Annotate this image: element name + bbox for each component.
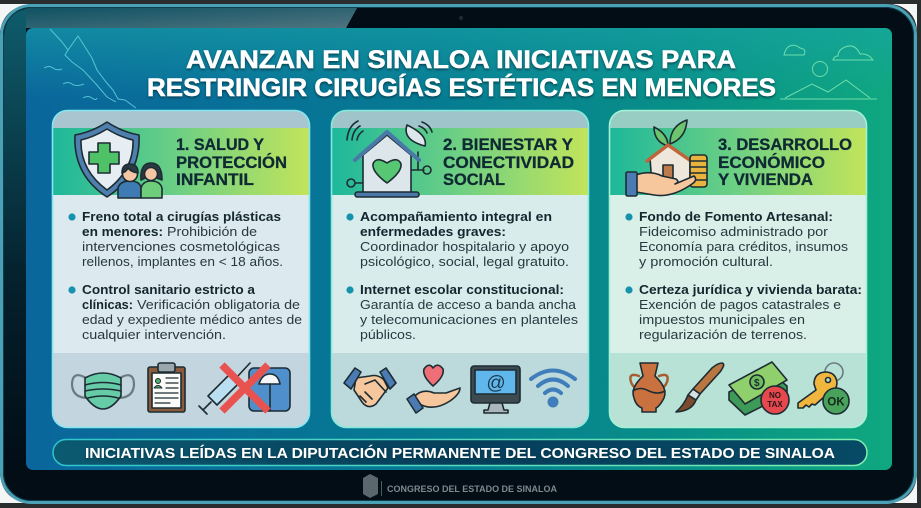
decoration: Sinaloa map outline xyxy=(44,29,136,108)
icon: stack of money with no tax badge: $ xyxy=(754,378,760,389)
text block: card 2 bullet 1: Coordinador hospitalario y apoyo xyxy=(360,239,569,254)
text block: card 1 bullet 2: clínicas: xyxy=(82,297,133,312)
heading: card 2 xyxy=(443,136,574,189)
icon: paintbrush xyxy=(676,363,724,412)
text block: card 2 bullet 1: Acompañamiento integral en xyxy=(360,209,552,224)
heading: card 1: 1. SALUD Y xyxy=(176,136,264,154)
heading: card 1 xyxy=(176,136,287,189)
text block: card 2 bullet 2: públicos. xyxy=(360,327,416,342)
icon: hand holding heart xyxy=(407,365,460,413)
panel: 1 salud y proteccion infantil xyxy=(52,110,310,428)
text block: card 3 bullet 1: Economía para créditos, insumos xyxy=(639,239,848,254)
icon: shield with cross and children xyxy=(75,122,162,198)
text block: card 3 bullet 1 xyxy=(625,209,848,269)
icon: computer monitor xyxy=(471,366,520,413)
text block: card 3 bullet 2 xyxy=(625,282,862,342)
title xyxy=(147,46,776,102)
icon: syringe and scale crossed out xyxy=(199,363,290,414)
text block: card 2 bullet 2: Internet escolar constitucional: xyxy=(360,282,564,297)
title: AVANZAN EN SINALOA INICIATIVAS PARA xyxy=(186,46,736,74)
text block: card 1 bullet 1: Prohibición de xyxy=(167,224,257,239)
decoration: clouds, sun and hills xyxy=(780,45,877,99)
text block: card 1 bullet 1: rellenos, implantes en < 18 años. xyxy=(82,254,283,269)
text block: card 3 bullet 2: Exención de pagos catastrales e xyxy=(639,297,841,312)
text block: card 1 bullet 2: edad y expediente médico antes de xyxy=(82,312,302,327)
heading: card 3: 3. DESARROLLO xyxy=(718,136,852,154)
icon: clipboard xyxy=(148,363,185,412)
icon: hand holding house, coins and sprout xyxy=(626,120,707,196)
text block: card 3 bullet 1: Fideicomiso administrado por xyxy=(639,224,829,239)
text block: card 2 bullet 2: y telecomunicaciones en planteles xyxy=(360,312,578,327)
icon: stack of money with no tax badge xyxy=(729,362,789,415)
text block: card 1 bullet 1: intervenciones cosmetológicas xyxy=(82,239,280,254)
text block: card 1 bullet 2: cualquier intervención. xyxy=(82,327,226,342)
icon: stack of money with no tax badge: TAX xyxy=(767,400,783,409)
panel: 3 desarrollo economico y vivienda xyxy=(609,110,867,428)
text block: card 2 bullet 1: enfermedades graves: xyxy=(360,224,506,239)
text block: card 1 bullet 1: Freno total a cirugías plásticas xyxy=(82,209,281,224)
icon: key with ok seal: OK xyxy=(827,396,845,408)
text block: card 3 bullet 2: regularización de terrenos. xyxy=(639,327,807,342)
text block: card 3 bullet 2: impuestos municipales en xyxy=(639,312,805,327)
text block: card 2 bullet 1: psicológico, social, legal gratuito. xyxy=(360,254,569,269)
emblem and institution name: CONGRESO DEL ESTADO DE SINALOA xyxy=(387,484,558,494)
heading: card 1: INFANTIL xyxy=(176,171,254,189)
title: RESTRINGIR CIRUGÍAS ESTÉTICAS EN MENORES xyxy=(147,73,776,102)
text block: card 3 bullet 2: Certeza jurídica y vivienda barata: xyxy=(639,282,862,297)
text block: card 2 bullet 1 xyxy=(346,209,569,269)
icon: handshake xyxy=(344,368,396,407)
icon: connected house with heart xyxy=(347,121,432,197)
text block: card 2 bullet 2 xyxy=(346,282,578,342)
emblem and institution name xyxy=(363,474,558,498)
text block: card 1 bullet 2: Control sanitario estricto a xyxy=(82,282,256,297)
icon: face mask xyxy=(72,373,134,409)
text block: card 3 bullet 1: Fondo de Fomento Artesanal: xyxy=(639,209,833,224)
icon: stack of money with no tax badge: NO xyxy=(769,391,781,400)
footer banner: INICIATIVAS LEÍDAS EN LA DIPUTACIÓN PERMANENTE DEL CONGRESO DEL ESTADO DE SINALOA xyxy=(85,444,835,462)
heading: card 3: ECONÓMICO xyxy=(718,153,825,172)
footer banner xyxy=(53,440,867,466)
panel: 2 bienestar y conectividad social xyxy=(331,110,589,428)
heading: card 1: PROTECCIÓN xyxy=(176,153,287,172)
text block: card 1 bullet 2: Verificación obligatoria de xyxy=(137,297,300,312)
heading: card 3: Y VIVIENDA xyxy=(718,171,813,189)
icon: computer monitor: @ xyxy=(486,373,506,394)
text block: card 1 bullet 1: en menores: xyxy=(82,224,163,239)
heading: card 2: 2. BIENESTAR Y xyxy=(443,136,573,154)
heading: card 3 xyxy=(718,136,852,189)
text block: card 2 bullet 2: Garantía de acceso a banda ancha xyxy=(360,297,577,312)
icon: clay vase xyxy=(630,363,668,412)
icon: key with ok seal xyxy=(798,363,849,414)
text block: card 1 bullet 2 xyxy=(68,282,302,342)
heading: card 2: CONECTIVIDAD xyxy=(443,154,574,172)
text block: card 1 bullet 1 xyxy=(68,209,283,269)
text block: card 3 bullet 1: y promoción cultural. xyxy=(639,254,773,269)
icon: wifi xyxy=(531,370,575,406)
heading: card 2: SOCIAL xyxy=(443,171,505,189)
